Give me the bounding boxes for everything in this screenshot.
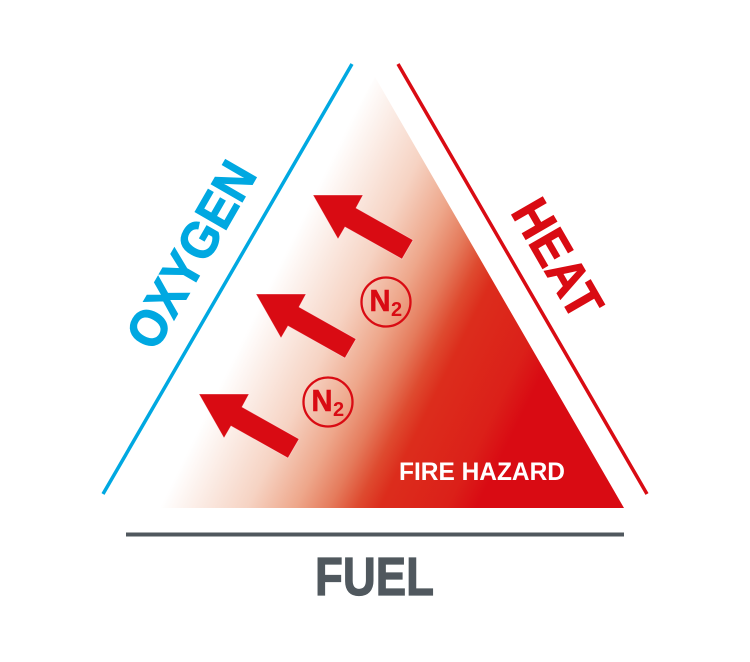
heat label: HEAT — [500, 189, 614, 329]
arrow: middle — [256, 294, 356, 358]
nitrogen badge: upper: N — [370, 283, 390, 318]
nitrogen badge: upper: 2 — [391, 299, 402, 321]
nitrogen badge: upper — [362, 278, 410, 326]
fuel label: FUEL — [315, 547, 434, 607]
fuel side line — [126, 532, 624, 536]
oxygen side line — [103, 64, 352, 494]
gradient fire hazard triangle — [126, 77, 624, 508]
nitrogen badge: lower: 2 — [333, 399, 344, 421]
fire hazard label: FIRE HAZARD — [399, 458, 565, 486]
nitrogen badge: lower: N — [312, 383, 332, 418]
nitrogen badge: lower — [304, 378, 352, 426]
arrow: bottom — [199, 394, 299, 458]
arrow: top — [313, 195, 413, 259]
oxygen label: OXYGEN — [115, 152, 268, 359]
heat side line — [398, 64, 647, 494]
